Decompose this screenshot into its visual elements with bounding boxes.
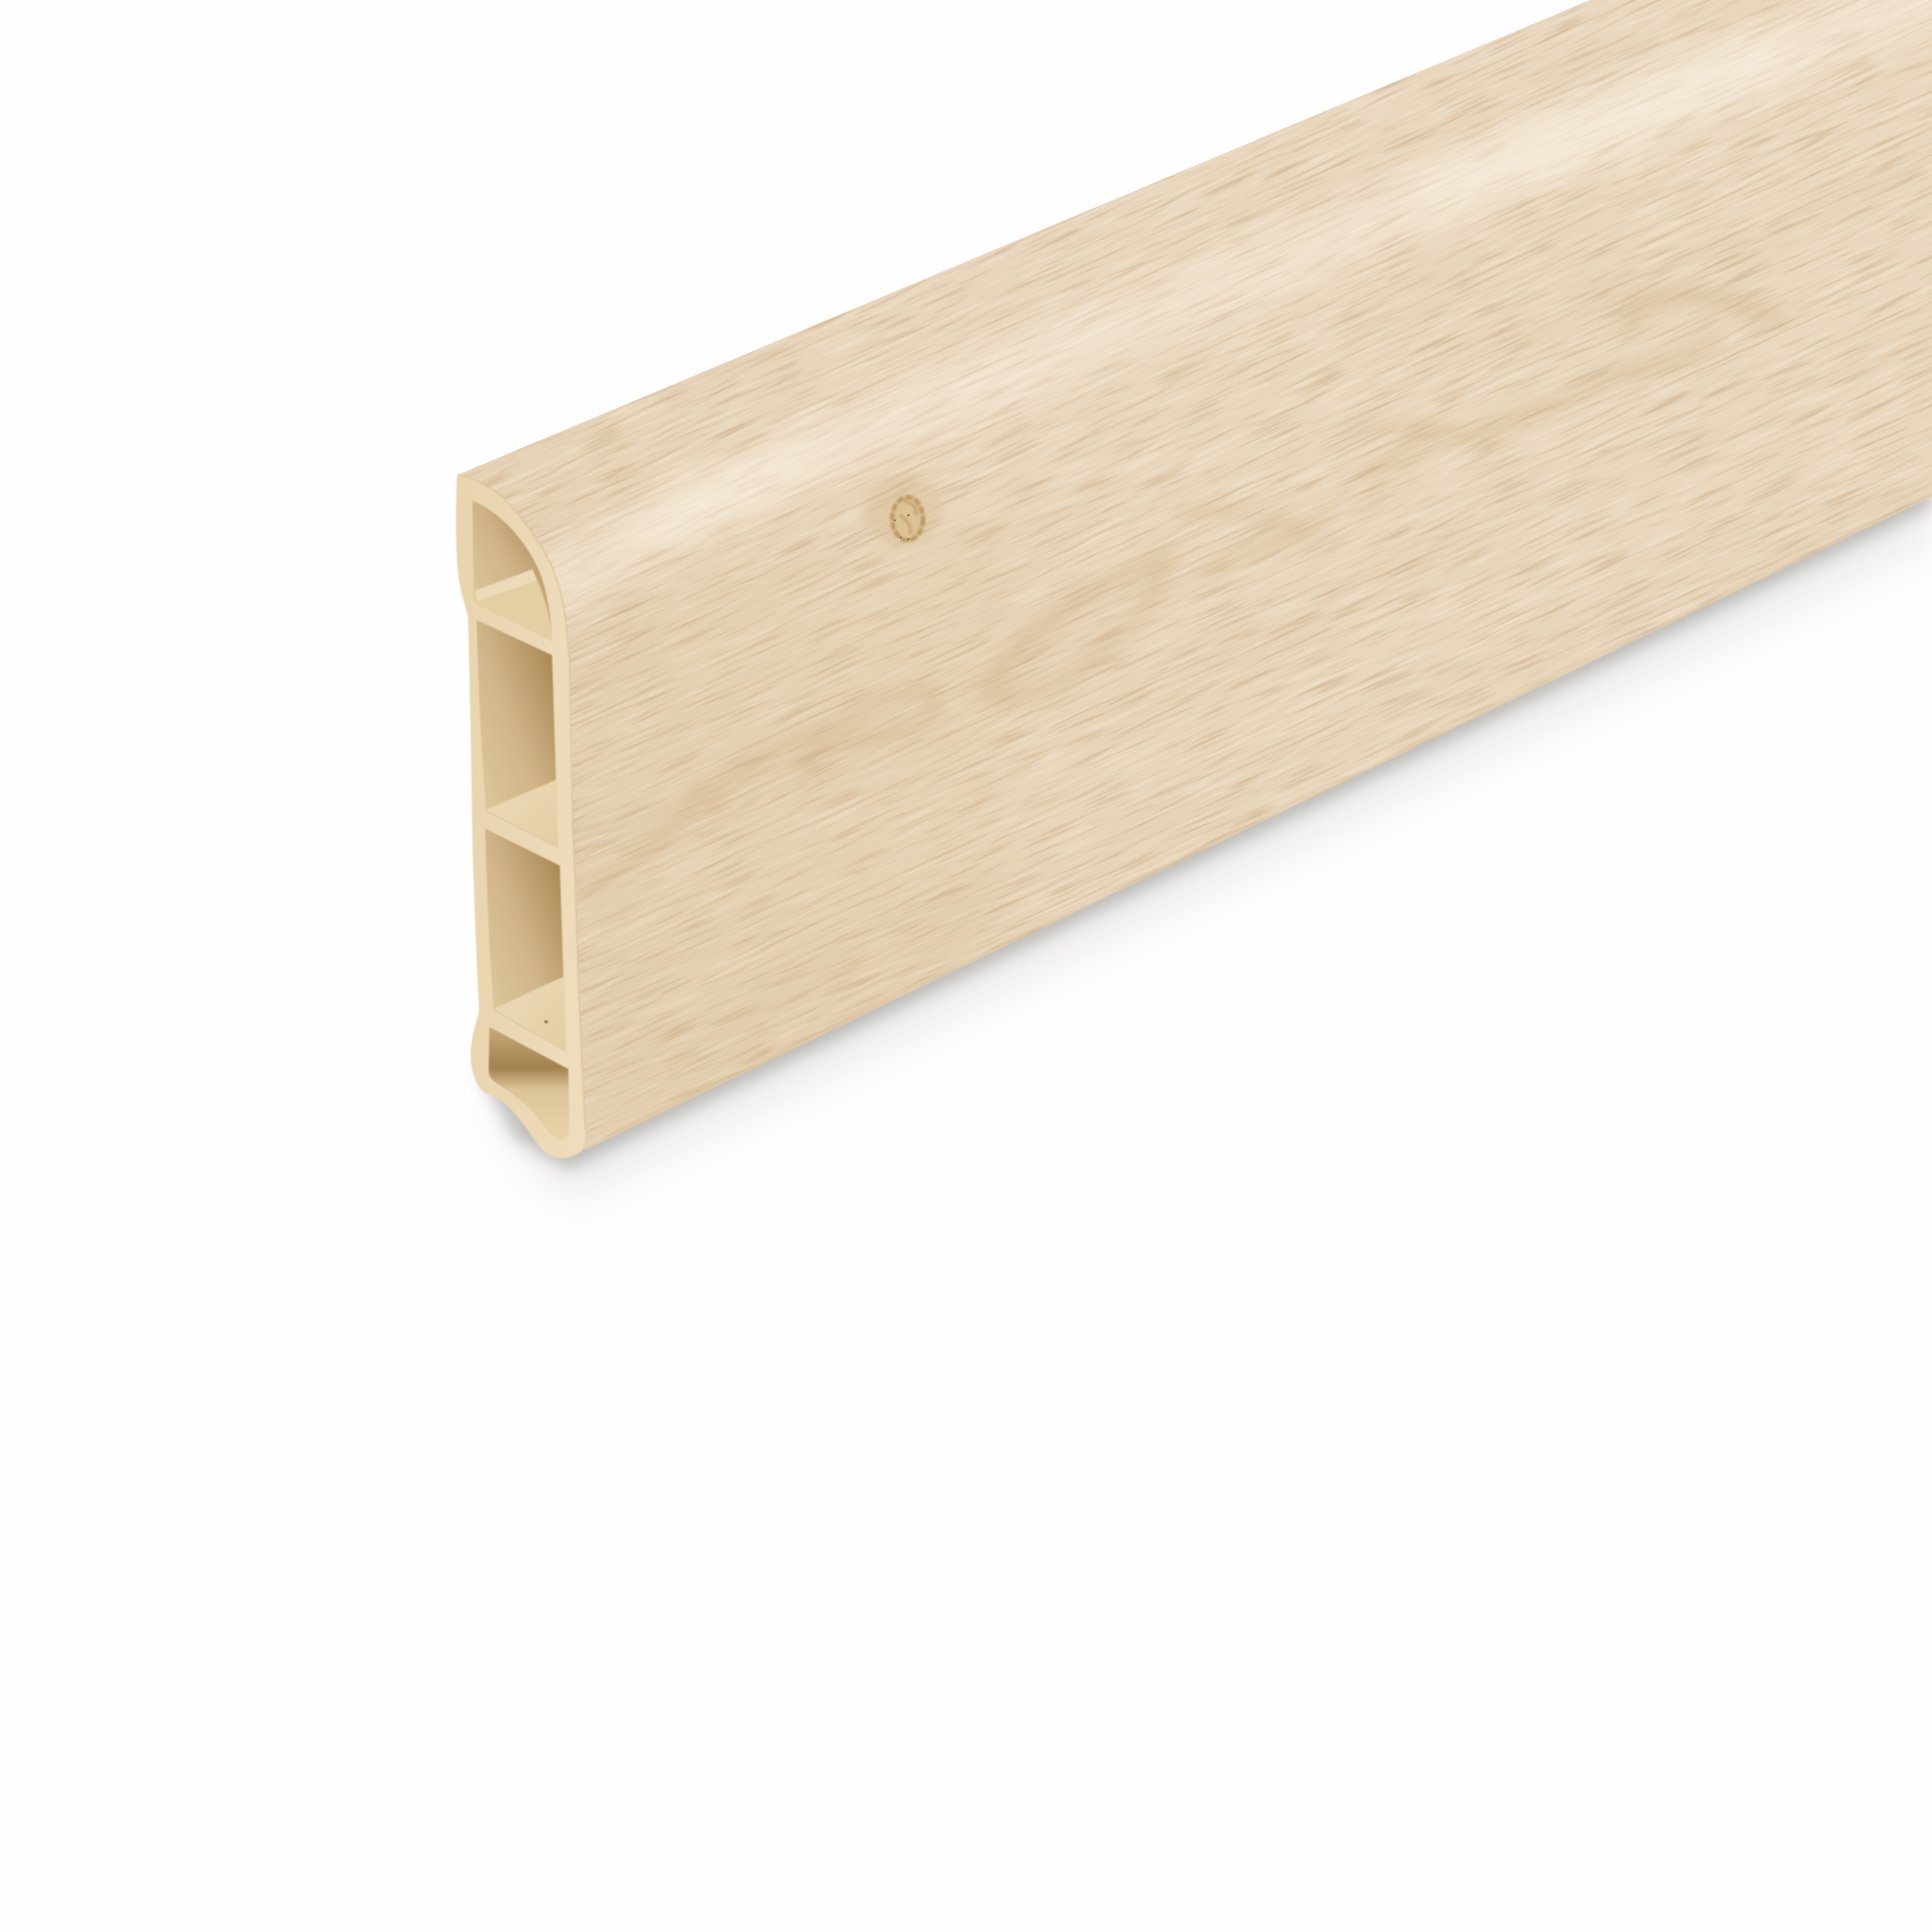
small hole — [544, 1020, 548, 1024]
thin wood edge line — [458, 475, 586, 1131]
third cavity — [485, 829, 566, 1052]
cathedral grain figures — [577, 295, 1777, 897]
product illustration: wood-effect hollow skirting board — [455, 0, 1932, 1195]
face base tone — [459, 0, 1932, 1151]
top cavity — [472, 501, 552, 641]
cast shadow beneath board — [477, 464, 1932, 1198]
board wood face — [459, 0, 1932, 1151]
second cavity — [477, 620, 558, 848]
shoulder highlight band — [550, 0, 1932, 584]
light wood grain — [460, 0, 1932, 1146]
dark wood grain — [467, 0, 1932, 1136]
shaded lower-left face area — [584, 515, 1030, 1151]
cap outer shell — [456, 475, 586, 1158]
end cap: hollow profile cross-section — [456, 475, 586, 1158]
bottom cavity — [489, 1027, 569, 1140]
darker front edge near bottom — [584, 496, 1932, 1151]
knot — [864, 476, 943, 548]
